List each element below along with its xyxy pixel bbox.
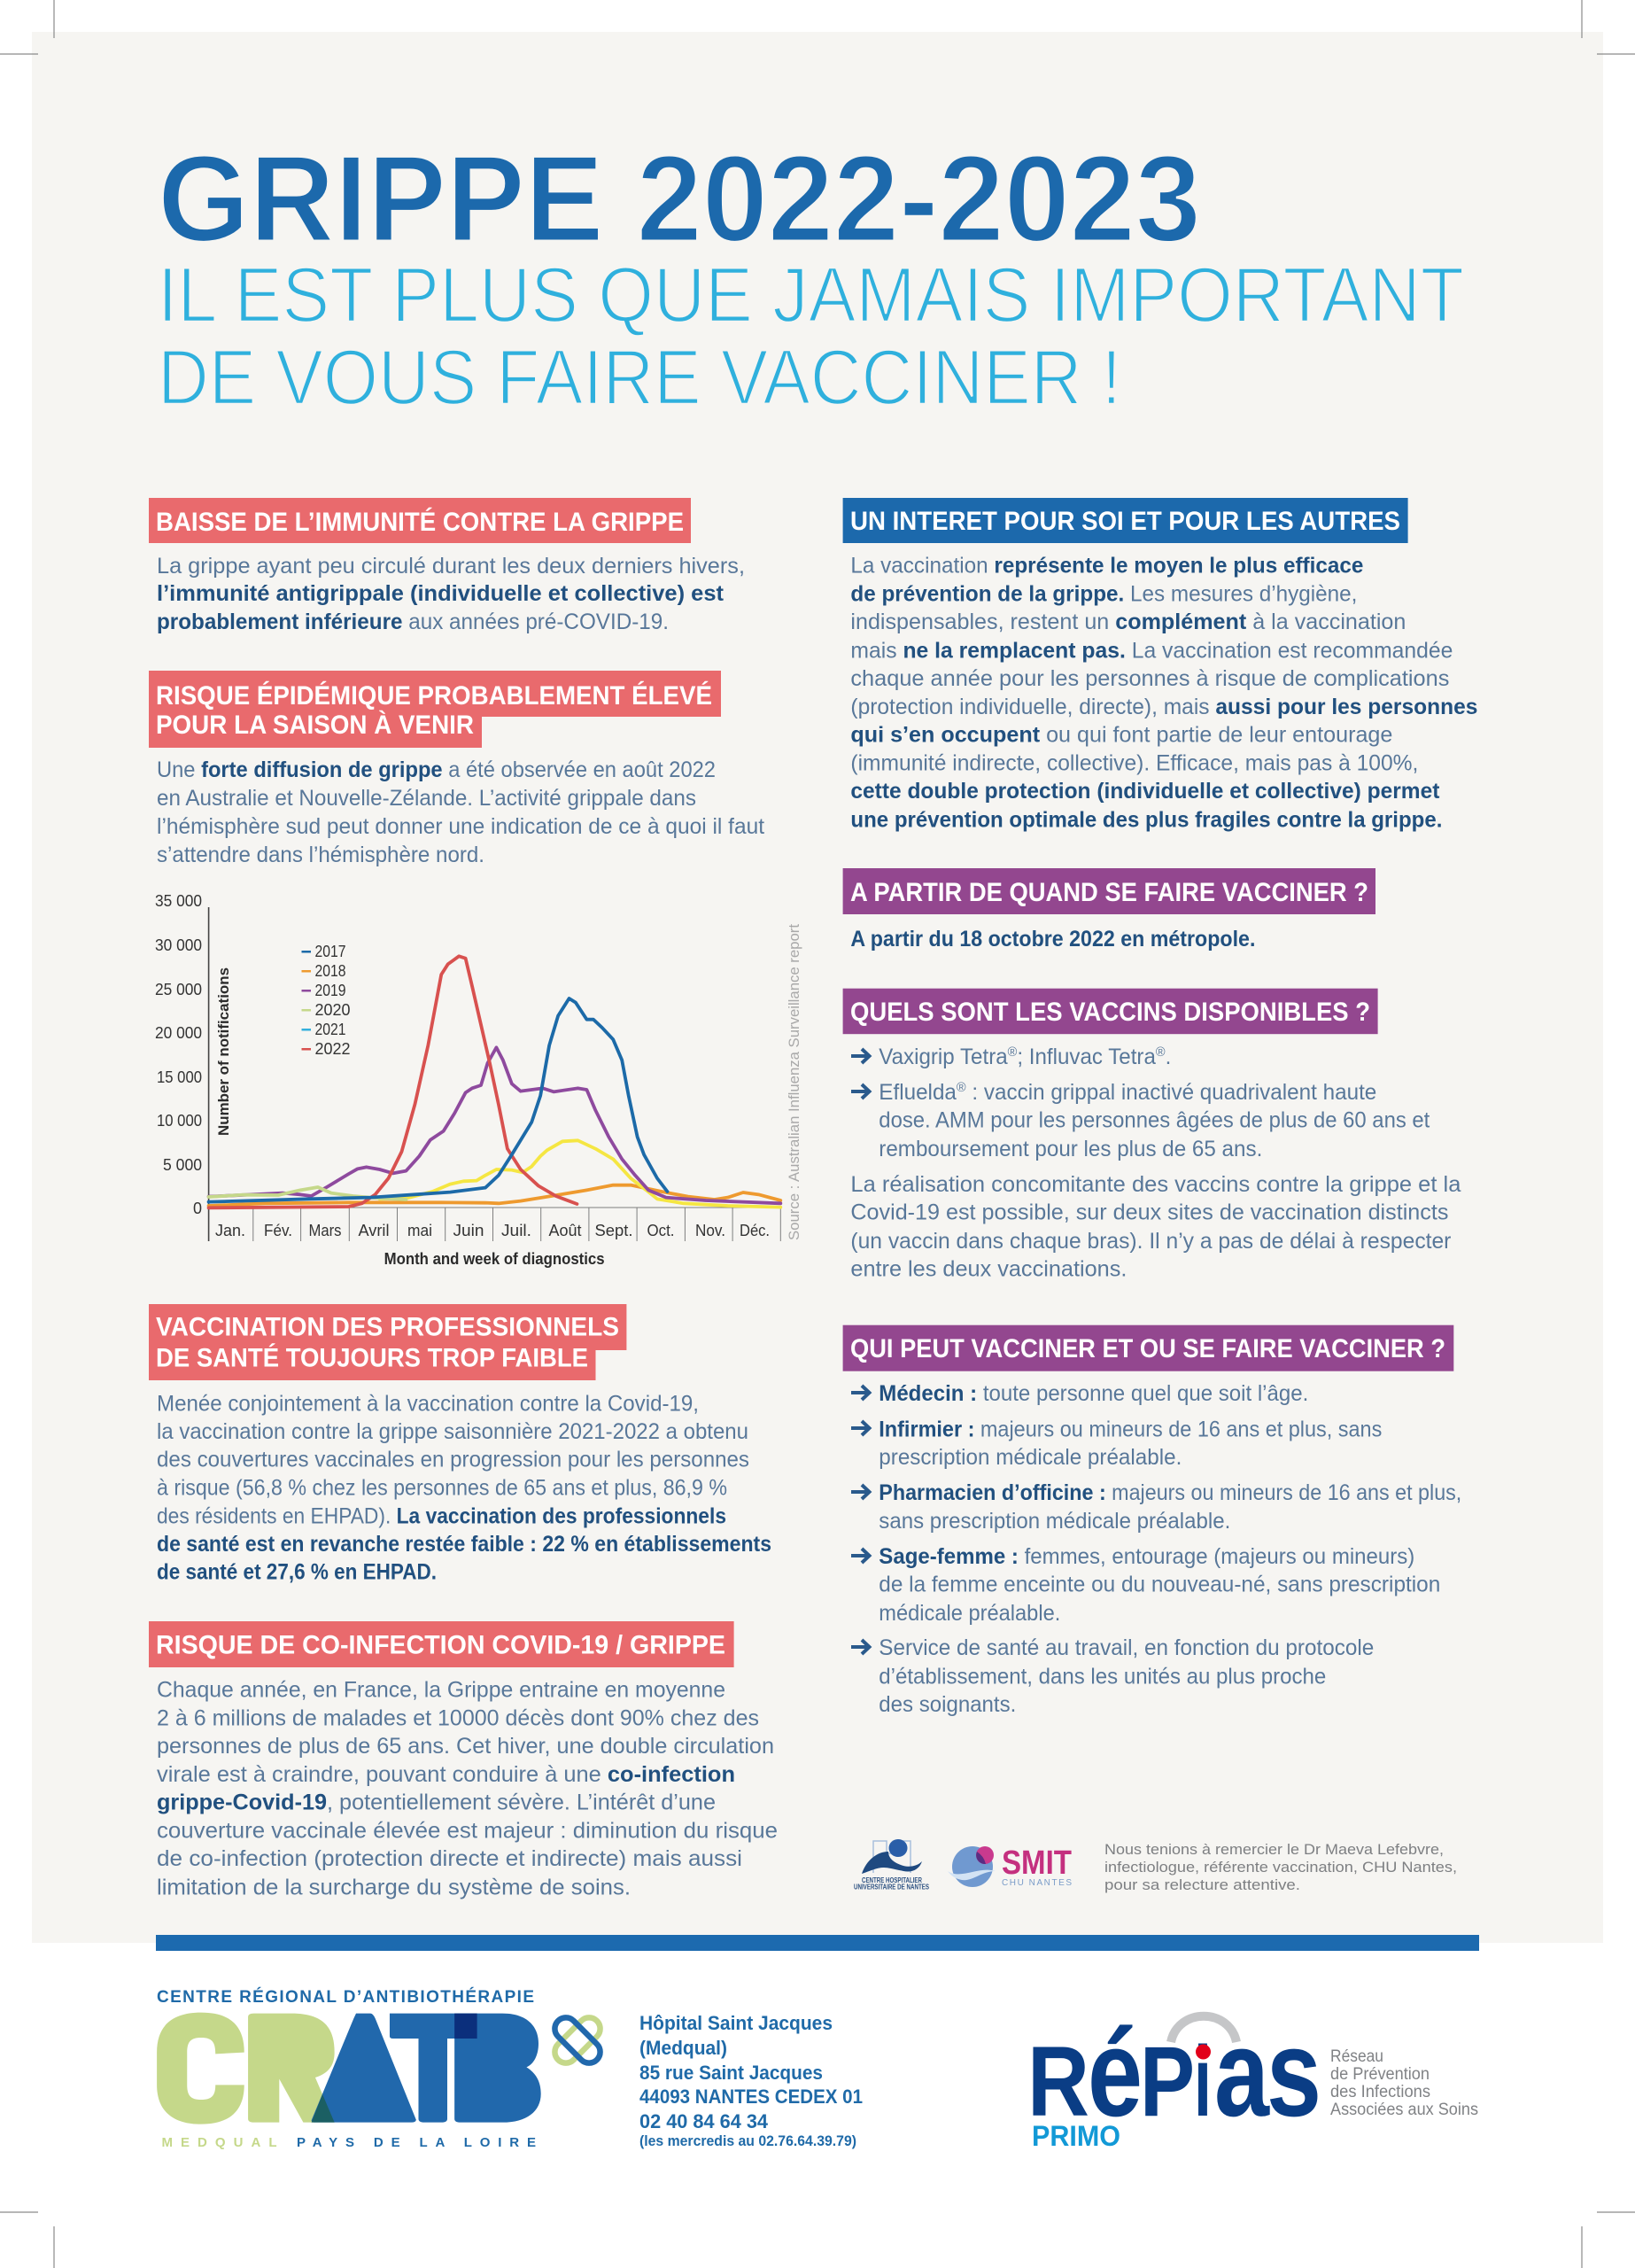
heading: QUI PEUT VACCINER ET OU SE FAIRE VACCINER ?: [850, 1334, 1445, 1363]
heading: RISQUE ÉPIDÉMIQUE PROBABLEMENT ÉLEVÉ: [156, 680, 712, 711]
panel: baisse de l'immunité: [149, 498, 745, 634]
text block: à risque (56,8 % chez les personnes de 65 ans et plus, 86,9 %: [157, 1476, 727, 1501]
heading: UN INTERET POUR SOI ET POUR LES AUTRES: [850, 507, 1400, 536]
month labels: Juil.: [501, 1222, 531, 1239]
text block: 2 à 6 millions de malades et 10000 décès dont 90% chez des: [157, 1705, 759, 1730]
list item: infirmier: [879, 1418, 1382, 1470]
text block: virale est à craindre, pouvant conduire à une co-infection: [157, 1762, 735, 1787]
text block: (un vaccin dans chaque bras). Il n’y a pas de délai à respecter: [850, 1229, 1451, 1254]
month labels: mai: [407, 1222, 432, 1239]
text block: [157, 757, 764, 867]
list item: service de santé: Service de santé au travail, en fonction du protocole: [879, 1635, 1374, 1660]
month labels: Déc.: [740, 1222, 770, 1239]
arrow: [851, 1084, 870, 1099]
logo: SMIT: CHU NANTES: [1002, 1878, 1072, 1888]
text block: limitation de la surcharge du système de soins.: [157, 1875, 631, 1899]
source note: Source : Australian Influenza Surveillance report: [786, 924, 802, 1240]
logo: CHU Nantes: CENTRE HOSPITALIER: [862, 1876, 922, 1884]
heading: [149, 1304, 626, 1380]
text block: (immunité indirecte, collective). Efficace, mais pas à 100%,: [850, 750, 1418, 775]
logo: SMIT: [948, 1845, 1072, 1888]
curve 2019: [209, 1047, 780, 1203]
address block: (les mercredis au 02.76.64.39.79): [639, 2132, 856, 2149]
panel: à partir de quand: [843, 868, 1375, 951]
heading: [149, 498, 691, 543]
text block: [850, 1172, 1461, 1282]
month labels: [215, 1222, 770, 1239]
month labels: Fév.: [264, 1222, 292, 1239]
text block: s’attendre dans l’hémisphère nord.: [157, 843, 484, 867]
address block: (Medqual): [639, 2037, 727, 2059]
text block: l’hémisphère sud peut donner une indication de ce à quoi il faut: [157, 814, 764, 839]
month labels: Août: [549, 1222, 581, 1239]
y axis labels: 5 000: [163, 1156, 202, 1174]
curve 2020: [209, 1187, 406, 1200]
y axis labels: [155, 892, 202, 1217]
text block: Chaque année, en France, la Grippe entraine en moyenne: [157, 1678, 725, 1703]
panel: un intérêt pour soi: [843, 498, 1477, 832]
y axis labels: 35 000: [155, 892, 202, 910]
heading: RISQUE DE CO-INFECTION COVID-19 / GRIPPE: [156, 1631, 725, 1660]
text block: de santé et 27,6 % en EHPAD.: [157, 1560, 437, 1585]
acknowledgement text: infectiologue, référente vaccination, CHU Nantes,: [1104, 1859, 1457, 1876]
list item: Efluelda: [879, 1080, 959, 1105]
subtitle: DE VOUS FAIRE VACCINER !: [158, 333, 1121, 421]
list item: service de santé: [879, 1635, 1374, 1717]
arrow: [851, 1549, 870, 1563]
y axis labels: 10 000: [157, 1112, 202, 1130]
title: GRIPPE 2022-2023: [158, 130, 1201, 268]
arrow: [851, 1386, 870, 1400]
list item: ®: [1008, 1045, 1017, 1060]
arrow: [851, 1640, 870, 1654]
logo: CRATB: MEDQUAL: [161, 2135, 276, 2150]
legend: 2021: [315, 1021, 345, 1038]
list item: médecin: Médecin : toute personne quel que soit l’âge.: [879, 1381, 1308, 1406]
address block: Hôpital Saint Jacques: [639, 2012, 833, 2034]
month labels: Mars: [308, 1222, 342, 1239]
curve 2021: [380, 1140, 780, 1208]
logo: RéPias Primo: R: [1027, 2026, 1089, 2137]
list item: sage-femme: de la femme enceinte ou du nouveau-né, sans prescription: [879, 1573, 1440, 1597]
logo: CRATB: CENTRE RÉGIONAL D’ANTIBIOTHÉRAPIE: [157, 1987, 534, 2007]
list item: ; Influvac Tetra: [1017, 1045, 1156, 1069]
text block: [157, 554, 745, 634]
logo: RéPias Primo: PRIMO: [1032, 2120, 1120, 2152]
text block: Covid-19 est possible, sur deux sites de vaccination distincts: [850, 1200, 1448, 1225]
text block: La réalisation concomitante des vaccins contre la grippe et la: [850, 1172, 1461, 1197]
acknowledgement text: pour sa relecture attentive.: [1104, 1876, 1300, 1893]
list item: service de santé: des soignants.: [879, 1692, 1016, 1717]
tagline: [1330, 2047, 1478, 2119]
tagline: des Infections: [1330, 2083, 1430, 2101]
text block: personnes de plus de 65 ans. Cet hiver, une double circulation: [157, 1734, 774, 1759]
legend: 2018: [315, 962, 345, 980]
heading: BAISSE DE L’IMMUNITÉ CONTRE LA GRIPPE: [156, 507, 684, 537]
month labels: Sept.: [595, 1222, 632, 1239]
logo: CRATB: PAYS DE LA LOIRE: [297, 2135, 536, 2150]
tagline: Réseau: [1330, 2047, 1383, 2066]
logo: RéPias Primo: a: [1214, 2003, 1270, 2142]
list item: sage-femme: [879, 1544, 1440, 1626]
line chart: notifications: [155, 892, 802, 1268]
heading: [149, 1621, 734, 1667]
acknowledgement text: Nous tenions à remercier le Dr Maeva Lefebvre,: [1104, 1841, 1444, 1858]
text block: en Australie et Nouvelle-Zélande. L’activité grippale dans: [157, 786, 696, 811]
address block: 02 40 84 64 34: [639, 2110, 769, 2132]
address block: 44093 NANTES CEDEX 01: [639, 2085, 863, 2108]
list item: .: [1166, 1045, 1171, 1069]
subtitle: IL EST PLUS QUE JAMAIS IMPORTANT: [158, 251, 1464, 338]
panel: qui peut vacciner: [843, 1325, 1461, 1717]
heading: VACCINATION DES PROFESSIONNELS: [156, 1313, 619, 1342]
y axis labels: 0: [193, 1200, 202, 1217]
subtitle: [158, 251, 1464, 421]
x axis title: Month and week of diagnostics: [384, 1250, 605, 1268]
heading: [149, 671, 721, 748]
logo: RéPias Primo: [1027, 2003, 1478, 2152]
text block: La grippe ayant peu circulé durant les deux derniers hivers,: [157, 554, 745, 579]
title: [158, 130, 1464, 421]
text block: la vaccination contre la grippe saisonnière 2021-2022 a obtenu: [157, 1419, 748, 1444]
text block: mais ne la remplacent pas. La vaccination est recommandée: [850, 638, 1453, 663]
text block: l’immunité antigrippale (individuelle et collective) est: [157, 581, 725, 606]
text block: qui s’en occupent ou qui font partie de leur entourage: [850, 722, 1392, 747]
list item: [879, 1080, 1430, 1161]
panel: risque épidémique: [149, 671, 764, 867]
heading: [843, 498, 1408, 543]
text block: une prévention optimale des plus fragiles contre la grippe.: [850, 807, 1442, 832]
logo: RéPias Primo: i: [1194, 2026, 1212, 2137]
text block: grippe-Covid-19, potentiellement sévère. L’intérêt d’une: [157, 1790, 716, 1815]
curve 2017: [209, 998, 667, 1202]
month labels: Juin: [453, 1222, 484, 1239]
logo: CHU Nantes: UNIVERSITAIRE DE NANTES: [854, 1884, 930, 1891]
list item: ®: [1156, 1045, 1166, 1060]
curve 2022: [209, 956, 577, 1208]
text block: [157, 1678, 778, 1899]
text block: chaque année pour les personnes à risque de complications: [850, 666, 1449, 691]
text block: des résidents en EHPAD). La vaccination des professionnels: [157, 1503, 726, 1528]
list item: remboursement pour les plus de 65 ans.: [879, 1137, 1262, 1161]
text block: [850, 554, 1477, 832]
legend: 2017: [315, 943, 345, 960]
logo: CHU Nantes: [854, 1839, 930, 1891]
heading: QUELS SONT LES VACCINS DISPONIBLES ?: [850, 998, 1370, 1027]
logo: RéPias Primo: é: [1088, 2003, 1143, 2142]
arrow: [851, 1485, 870, 1499]
list item: Vaxigrip Tetra: [879, 1045, 1012, 1069]
text block: probablement inférieure aux années pré-COVID-19.: [157, 610, 669, 634]
panel: vaccination des professionnels: [149, 1304, 771, 1585]
heading: A PARTIR DE QUAND SE FAIRE VACCINER ?: [850, 878, 1368, 907]
text block: La vaccination représente le moyen le plus efficace: [850, 554, 1363, 579]
icon: knot: [550, 2013, 605, 2068]
list item: dose. AMM pour les personnes âgées de plus de 60 ans et: [879, 1108, 1430, 1133]
legend: 2022: [315, 1040, 351, 1058]
footer bar: [156, 1935, 1479, 1951]
list item: infirmier: prescription médicale préalable.: [879, 1445, 1182, 1470]
list item: pharmacien: Pharmacien d’officine : majeurs ou mineurs de 16 ans et plus,: [879, 1480, 1461, 1505]
y axis labels: 25 000: [155, 981, 202, 998]
tagline: de Prévention: [1330, 2065, 1430, 2084]
legend: [301, 943, 351, 1058]
y axis labels: 15 000: [157, 1068, 202, 1086]
month labels: Nov.: [695, 1222, 725, 1239]
acknowledgement text: [1104, 1841, 1457, 1893]
logo: SMIT: SMIT: [1002, 1845, 1072, 1882]
logo: CRATB: [157, 1987, 605, 2150]
heading: [843, 989, 1378, 1034]
month labels: Avril: [358, 1222, 390, 1239]
list item: ®: [957, 1080, 966, 1095]
list item: pharmacien: [879, 1480, 1461, 1534]
address block: [639, 2012, 863, 2149]
text block: A partir du 18 octobre 2022 en métropole.: [850, 927, 1255, 951]
text block: des couvertures vaccinales en progression pour les personnes: [157, 1448, 749, 1472]
heading: [843, 1325, 1453, 1371]
text block: Menée conjointement à la vaccination contre la Covid-19,: [157, 1391, 699, 1416]
curve 2018: [209, 1185, 780, 1206]
text block: entre les deux vaccinations.: [850, 1257, 1127, 1282]
legend: 2020: [315, 1001, 351, 1019]
legend: 2019: [315, 982, 345, 999]
y axis labels: 20 000: [155, 1024, 202, 1042]
text block: couverture vaccinale élevée est majeur : diminution du risque: [157, 1818, 778, 1843]
arrow: [851, 1049, 870, 1063]
logo: RéPias Primo: s: [1267, 2003, 1321, 2142]
list item: : vaccin grippal inactivé quadrivalent haute: [966, 1080, 1376, 1105]
heading: [843, 868, 1375, 914]
text block: Une forte diffusion de grippe a été observée en août 2022: [157, 757, 716, 782]
tagline: Associées aux Soins: [1330, 2101, 1478, 2119]
text block: (protection individuelle, directe), mais aussi pour les personnes: [850, 695, 1477, 719]
panel: risque de co-infection: [149, 1621, 778, 1899]
text block: [157, 1391, 771, 1585]
y axis title: Number of notifications: [215, 967, 232, 1136]
arrow: [851, 1421, 870, 1435]
heading: POUR LA SAISON À VENIR: [156, 710, 474, 740]
text block: de santé est en revanche restée faible : 22 % en établissements: [157, 1532, 771, 1557]
list item: infirmier: Infirmier : majeurs ou mineurs de 16 ans et plus, sans: [879, 1418, 1382, 1442]
logo: RéPias Primo: P: [1140, 2026, 1195, 2137]
text block: indispensables, restent un complément à la vaccination: [850, 610, 1406, 634]
address block: 85 rue Saint Jacques: [639, 2062, 823, 2084]
list item: service de santé: d’établissement, dans les unités au plus proche: [879, 1665, 1326, 1689]
month labels: Jan.: [215, 1222, 245, 1239]
list item: sage-femme: Sage-femme : femmes, entourage (majeurs ou mineurs): [879, 1544, 1414, 1569]
panel: vaccins disponibles: [843, 989, 1461, 1282]
text block: cette double protection (individuelle et collective) permet: [850, 779, 1440, 804]
list item: sage-femme: médicale préalable.: [879, 1601, 1060, 1626]
month labels: Oct.: [647, 1222, 675, 1239]
y axis labels: 30 000: [155, 936, 202, 954]
data curves: [209, 956, 780, 1208]
text block: de co-infection (protection directe et indirecte) mais aussi: [157, 1846, 742, 1871]
heading: DE SANTÉ TOUJOURS TROP FAIBLE: [156, 1343, 588, 1373]
list item: pharmacien: sans prescription médicale préalable.: [879, 1509, 1230, 1534]
text block: de prévention de la grippe. Les mesures d’hygiène,: [850, 581, 1357, 606]
